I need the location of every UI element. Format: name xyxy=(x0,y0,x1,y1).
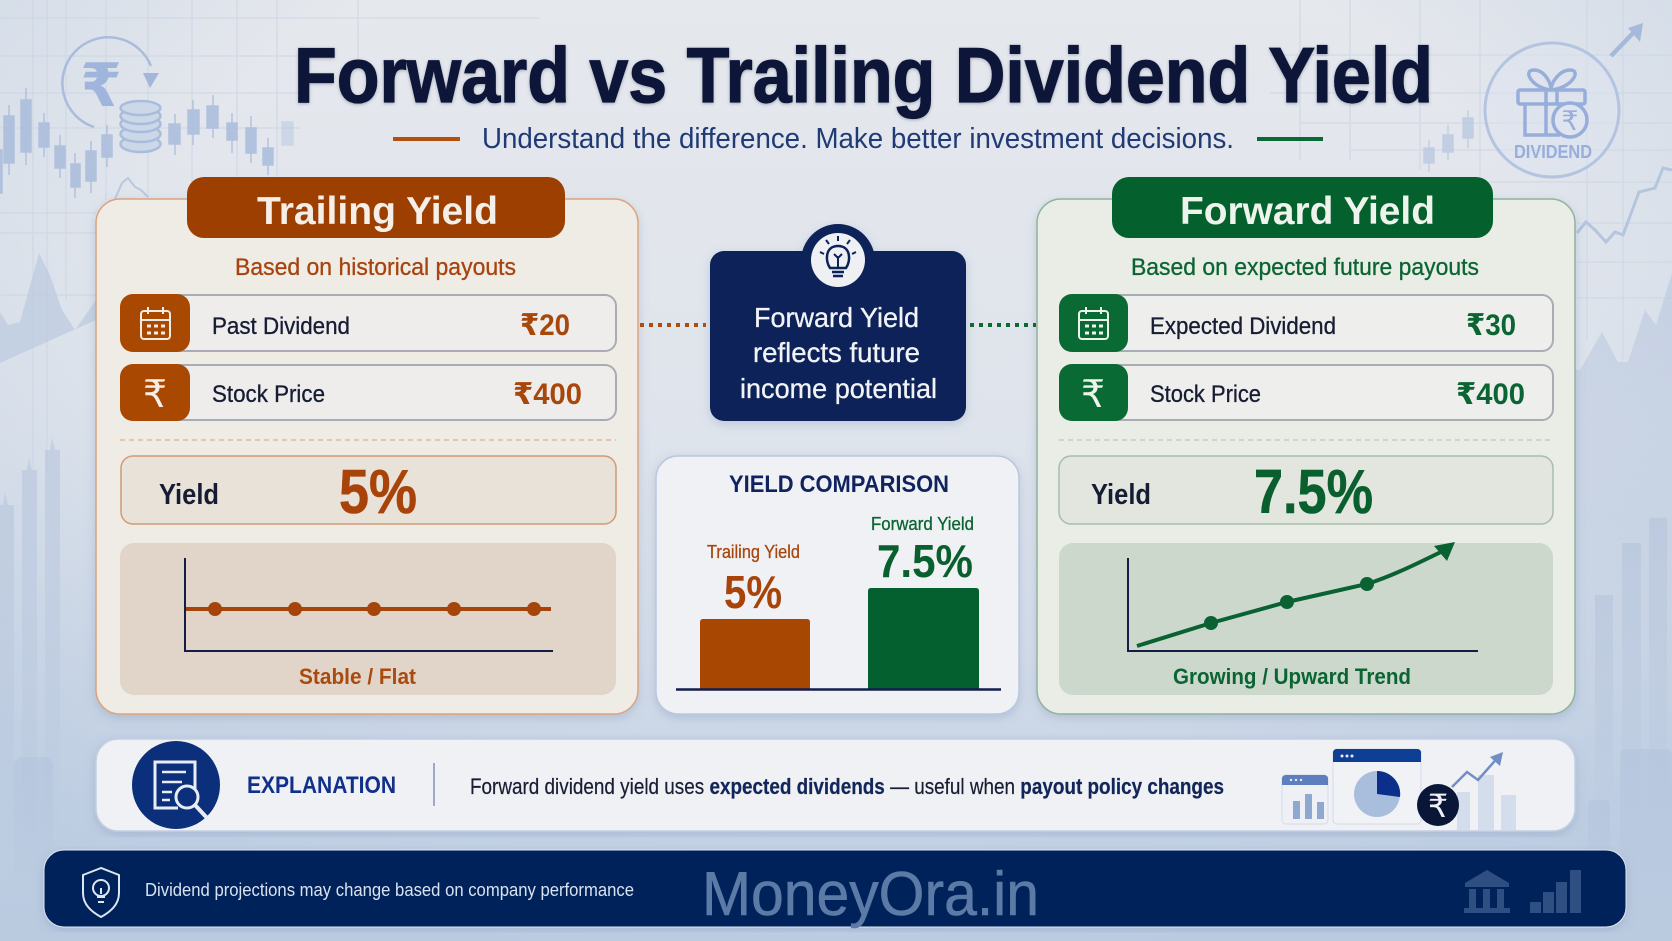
flat line chart xyxy=(120,543,616,695)
panel: trailing yield xyxy=(96,177,638,714)
icon: shield bulb xyxy=(83,868,119,917)
right line xyxy=(1577,168,1672,242)
row: past dividend: Past Dividend xyxy=(212,313,350,340)
yield box: Yield xyxy=(159,479,219,511)
row: stock price: ₹ xyxy=(143,374,167,416)
forward subtitle: Based on expected future payouts xyxy=(1131,254,1479,281)
connector: left dotted xyxy=(640,323,706,327)
panel: yield comparison: YIELD COMPARISON xyxy=(729,471,949,498)
growth line chart: Growing / Upward Trend xyxy=(1173,664,1411,689)
icon: calendar xyxy=(141,307,170,339)
bar: forward: 7.5% xyxy=(877,535,973,587)
header: trailing yield xyxy=(187,177,565,238)
bar: trailing: 5% xyxy=(724,566,782,618)
icon: dividend gift badge xyxy=(1485,23,1643,177)
panel: yield comparison xyxy=(656,456,1019,714)
icon: dividend gift badge: ₹ xyxy=(1561,106,1579,136)
row: stock price xyxy=(120,364,616,421)
row: expected dividend xyxy=(1059,294,1553,352)
watermark: MoneyOra.in xyxy=(702,860,1039,929)
trailing subtitle: Based on historical payouts xyxy=(235,254,516,281)
icon: light bulb xyxy=(811,233,865,287)
footer: Dividend projections may change based on company performance xyxy=(145,880,634,900)
icon: rupee cycle and coins: ₹ xyxy=(80,52,122,119)
footer xyxy=(44,850,1626,929)
row: stock price: ₹400 xyxy=(1456,378,1525,411)
icon: calendar xyxy=(1079,307,1108,339)
panel: explanation xyxy=(96,739,1575,831)
bar: forward: Forward Yield xyxy=(871,514,974,534)
bar: trailing: Trailing Yield xyxy=(707,542,800,562)
icon: document search xyxy=(132,741,220,829)
row: expected dividend: ₹30 xyxy=(1466,309,1516,342)
title: Forward vs Trailing Dividend Yield xyxy=(294,31,1433,119)
row: stock price: ₹400 xyxy=(513,378,582,411)
arrow xyxy=(1611,23,1643,56)
callout: forward yield insight xyxy=(710,224,966,421)
panel: forward yield xyxy=(1037,177,1575,714)
callout: forward yield insight: reflects future xyxy=(753,337,920,368)
yield box xyxy=(121,456,616,527)
yield box: 5% xyxy=(339,458,417,527)
small left ridge xyxy=(115,178,148,199)
header: forward yield: Forward Yield xyxy=(1180,190,1435,233)
left mountain xyxy=(0,253,96,363)
right candlesticks xyxy=(1424,110,1473,172)
icon: bank and bars xyxy=(1464,870,1581,913)
bar: trailing xyxy=(700,542,810,689)
yield box: 7.5% xyxy=(1254,458,1373,527)
icon: dashboard illustration: ₹ xyxy=(1428,788,1448,824)
right mountain xyxy=(1575,273,1672,680)
icon: dividend gift badge: DIVIDEND xyxy=(1514,142,1592,162)
explanation text: Forward dividend yield uses expected dividends — useful when payout policy changes xyxy=(470,774,1224,799)
panel: explanation: EXPLANATION xyxy=(247,772,396,799)
row: stock price: ₹ xyxy=(1081,374,1105,416)
yield box xyxy=(1059,456,1553,527)
row: stock price xyxy=(1059,364,1553,421)
row: past dividend xyxy=(120,294,616,352)
bar: forward xyxy=(868,514,979,689)
row: expected dividend: Expected Dividend xyxy=(1150,313,1336,340)
flat line chart: Stable / Flat xyxy=(299,664,417,689)
towers xyxy=(0,438,1667,850)
row: past dividend: ₹20 xyxy=(520,309,570,342)
yield box: Yield xyxy=(1091,479,1151,511)
row: stock price: Stock Price xyxy=(1150,381,1261,408)
row: stock price: Stock Price xyxy=(212,381,325,408)
icon: rupee cycle and coins xyxy=(62,37,161,152)
growth line chart xyxy=(1059,542,1553,695)
callout: forward yield insight: income potential xyxy=(740,373,937,404)
subtitle: Understand the difference. Make better investment decisions. xyxy=(482,123,1234,155)
connector: right dotted xyxy=(970,323,1036,327)
callout: forward yield insight: Forward Yield xyxy=(754,302,919,333)
header: forward yield xyxy=(1112,177,1493,238)
left candlesticks xyxy=(0,88,293,198)
icon: dashboard illustration xyxy=(1282,749,1516,830)
header: trailing yield: Trailing Yield xyxy=(257,190,498,233)
